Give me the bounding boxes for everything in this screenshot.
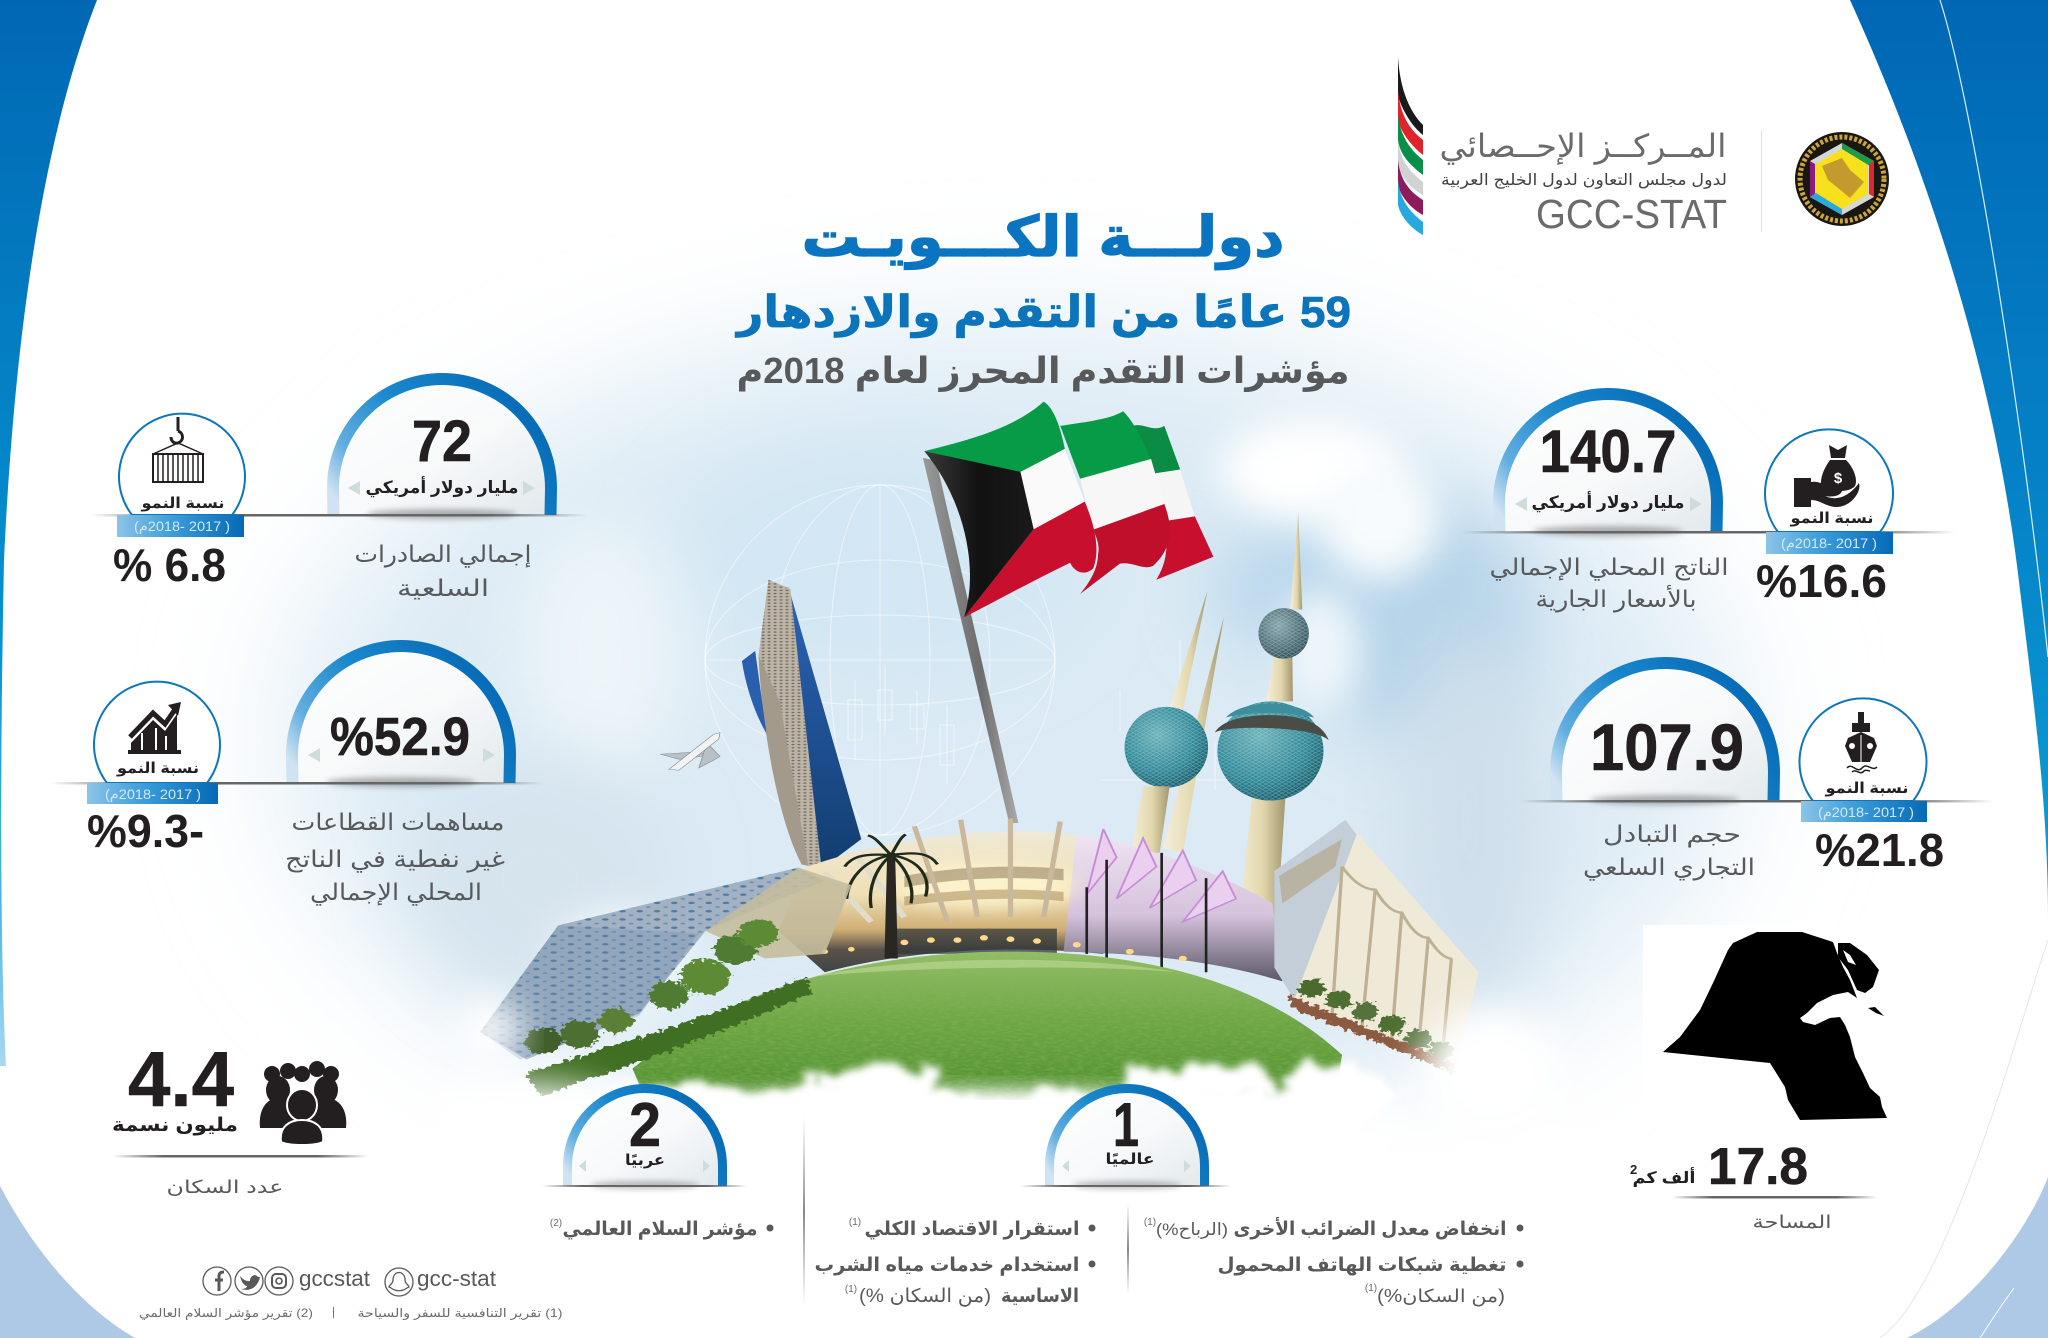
- bullet item: مؤشر السلام العالمي: [562, 1219, 758, 1240]
- list: middle column: استقرار الاقتصاد الكلي: [864, 1219, 1080, 1240]
- panel: non-oil sectors: [50, 646, 543, 906]
- period bar: [1801, 801, 1927, 822]
- subtitle: 59 عامًا من التقدم والازدهار: [735, 288, 1351, 338]
- description: إجمالي الصادرات: [354, 541, 532, 568]
- flag pole: [923, 458, 1018, 823]
- column dividers: [803, 1117, 1129, 1307]
- tree rows and hedges: [524, 919, 1455, 1096]
- logo Arabic name: المــركــز الإحــصائي: [1440, 128, 1726, 165]
- social handles: [203, 1266, 496, 1296]
- Kuwait Towers: [1125, 513, 1329, 963]
- label: نسبة النمو: [140, 495, 224, 512]
- list: right column: تغطية شبكات الهاتف المحمول: [1218, 1255, 1506, 1276]
- panel: GDP: بالأسعار الجارية: [1536, 585, 1696, 613]
- map backing: [1643, 925, 1943, 1125]
- unit: مليار دولار أمريكي: [1532, 491, 1684, 513]
- panel: area: 2: [1630, 1162, 1637, 1177]
- panel: merchandise trade: التجاري السلعي: [1583, 854, 1755, 881]
- panel: trade growth: [1800, 698, 1944, 876]
- panel: GDP: [1461, 394, 1955, 613]
- list: middle column: استخدام خدمات مياه الشرب: [814, 1255, 1080, 1276]
- country title: دولـــة الكـــويـت: [802, 205, 1284, 270]
- value: 140.7: [1540, 418, 1676, 485]
- panel: merchandise trade: [1520, 663, 1993, 881]
- value: %52.9: [330, 707, 470, 767]
- description: مساهمات القطاعات: [292, 809, 504, 835]
- logo ribbons: [1398, 57, 1423, 235]
- title block: [735, 205, 1351, 392]
- description: عدد السكان: [166, 1177, 284, 1197]
- panel: non-oil sectors: المحلي الإجمالي: [310, 879, 482, 906]
- gauge: [1020, 1088, 1231, 1189]
- list: right column: انخفاض معدل الضرائب الأخرى: [1234, 1217, 1506, 1240]
- icon: snapchat: [385, 1268, 413, 1296]
- right assembly building: [1274, 820, 1479, 1071]
- growth value: %16.6: [1756, 555, 1887, 607]
- panel: GDP growth: [1756, 429, 1893, 607]
- icon: container on crane hook: [153, 417, 203, 482]
- panel: Arab rank: [542, 1088, 774, 1240]
- value: 4.4: [128, 1035, 234, 1123]
- period bar: [87, 783, 218, 804]
- icon: crowd: [260, 1061, 346, 1145]
- growth value: % 6.8: [113, 539, 226, 591]
- growth bubble: [119, 414, 245, 515]
- unit: مليار دولار أمريكي: [366, 476, 518, 498]
- gauge: [542, 1088, 747, 1189]
- panel: exports growth: ( 2017 -2018م): [134, 519, 230, 534]
- growth bubble: [1765, 429, 1893, 532]
- panel: exports: السلعية: [397, 575, 489, 601]
- list: middle column: الاساسية: [1001, 1286, 1079, 1307]
- list: middle column: (1): [849, 1217, 861, 1228]
- Liberation tower: [742, 580, 861, 869]
- map of Kuwait: [1663, 932, 1887, 1120]
- unit: عالميًا: [1106, 1151, 1154, 1168]
- sub-subtitle: مؤشرات التقدم المحرز لعام 2018م: [736, 350, 1350, 392]
- unit: مليون نسمة: [112, 1115, 238, 1136]
- icon: ship: [1845, 712, 1877, 773]
- gauge: [1461, 394, 1955, 536]
- sky and cloud backdrop: [200, 330, 1800, 1280]
- panel: GDP growth: ( 2017 -2018م): [1781, 536, 1877, 551]
- list: right column: (من السكان%): [1377, 1286, 1505, 1307]
- panel: area: [1630, 925, 1943, 1232]
- footnotes: (2) تقرير مؤشر السلام العالمي: [139, 1306, 313, 1321]
- value: 1: [1113, 1091, 1139, 1160]
- value: 17.8: [1708, 1138, 1808, 1196]
- globe and candlestick watermark: [705, 485, 1280, 835]
- panel: global rank: [1020, 1088, 1231, 1189]
- Kuwait flag: [924, 402, 1213, 617]
- panel: non-oil growth: [87, 682, 220, 857]
- logo: GCC-STAT: [1398, 57, 1727, 237]
- icons: facebook, twitter, instagram: [203, 1267, 293, 1295]
- growth value: %9.3-: [87, 805, 204, 857]
- gauge: [90, 379, 587, 519]
- growth value: %21.8: [1815, 824, 1944, 876]
- logo Latin name: GCC-STAT: [1536, 191, 1727, 237]
- footnotes: [139, 1306, 563, 1321]
- list: right column: (1): [1365, 1283, 1377, 1294]
- list: right column: [1144, 1217, 1524, 1307]
- divider and GCC emblem: [1761, 130, 1889, 232]
- list: middle column: (1): [845, 1284, 857, 1295]
- icon: money bag and hand: [1794, 445, 1859, 507]
- rule: [1672, 1196, 1877, 1198]
- description: الناتج المحلي الإجمالي: [1490, 554, 1728, 581]
- foreground clouds: [430, 1000, 1560, 1176]
- footnotes: (1) تقرير التنافسية للسفر والسياحة: [358, 1306, 562, 1321]
- palm tree: [845, 835, 938, 958]
- label: نسبة النمو: [116, 760, 199, 777]
- icon: rising chart: [128, 702, 181, 754]
- gauge: [1520, 663, 1993, 805]
- unit: عربيًا: [625, 1152, 665, 1169]
- stadium: [778, 818, 1282, 981]
- panel: exports growth: [113, 414, 245, 591]
- growth bubble: [1800, 698, 1926, 801]
- label: نسبة النمو: [1789, 510, 1874, 527]
- period bar: [1766, 532, 1893, 554]
- panel: population: [112, 1035, 368, 1197]
- value: 107.9: [1590, 710, 1744, 784]
- list: right column: (1): [1144, 1217, 1156, 1228]
- value: 72: [412, 409, 472, 474]
- central illustration: Kuwait landmarks on green globe: [480, 402, 1479, 1100]
- list: middle column: (من السكان %): [859, 1286, 991, 1307]
- list: middle column: [814, 1217, 1096, 1307]
- rule: [113, 1155, 368, 1158]
- cultural centre building: [480, 868, 851, 1059]
- green grass dome: [633, 952, 1342, 1100]
- handle: gcc-stat: [417, 1266, 496, 1291]
- airplane: [660, 733, 720, 770]
- gauge: [50, 646, 543, 787]
- panel: non-oil growth: ( 2017 -2018م): [105, 787, 201, 802]
- bullet item: (2): [550, 1218, 562, 1229]
- panel: non-oil sectors: غير نفطية في الناتج: [285, 846, 505, 873]
- description: المساحة: [1752, 1212, 1832, 1232]
- handle: gccstat: [299, 1266, 370, 1291]
- description: حجم التبادل: [1603, 821, 1741, 848]
- list: right column: (الرباح%): [1156, 1220, 1228, 1240]
- period bar: [117, 515, 244, 537]
- panel: trade growth: ( 2017 -2018م): [1818, 805, 1914, 820]
- unit: ألف كم: [1632, 1167, 1696, 1187]
- growth bubble: [94, 682, 220, 783]
- icon: money bag and hand: $: [1834, 470, 1843, 487]
- logo Arabic subtitle: لدول مجلس التعاون لدول الخليج العربية: [1441, 172, 1727, 190]
- label: نسبة النمو: [1824, 780, 1908, 797]
- value: 2: [629, 1091, 661, 1160]
- panel: exports: [90, 379, 587, 601]
